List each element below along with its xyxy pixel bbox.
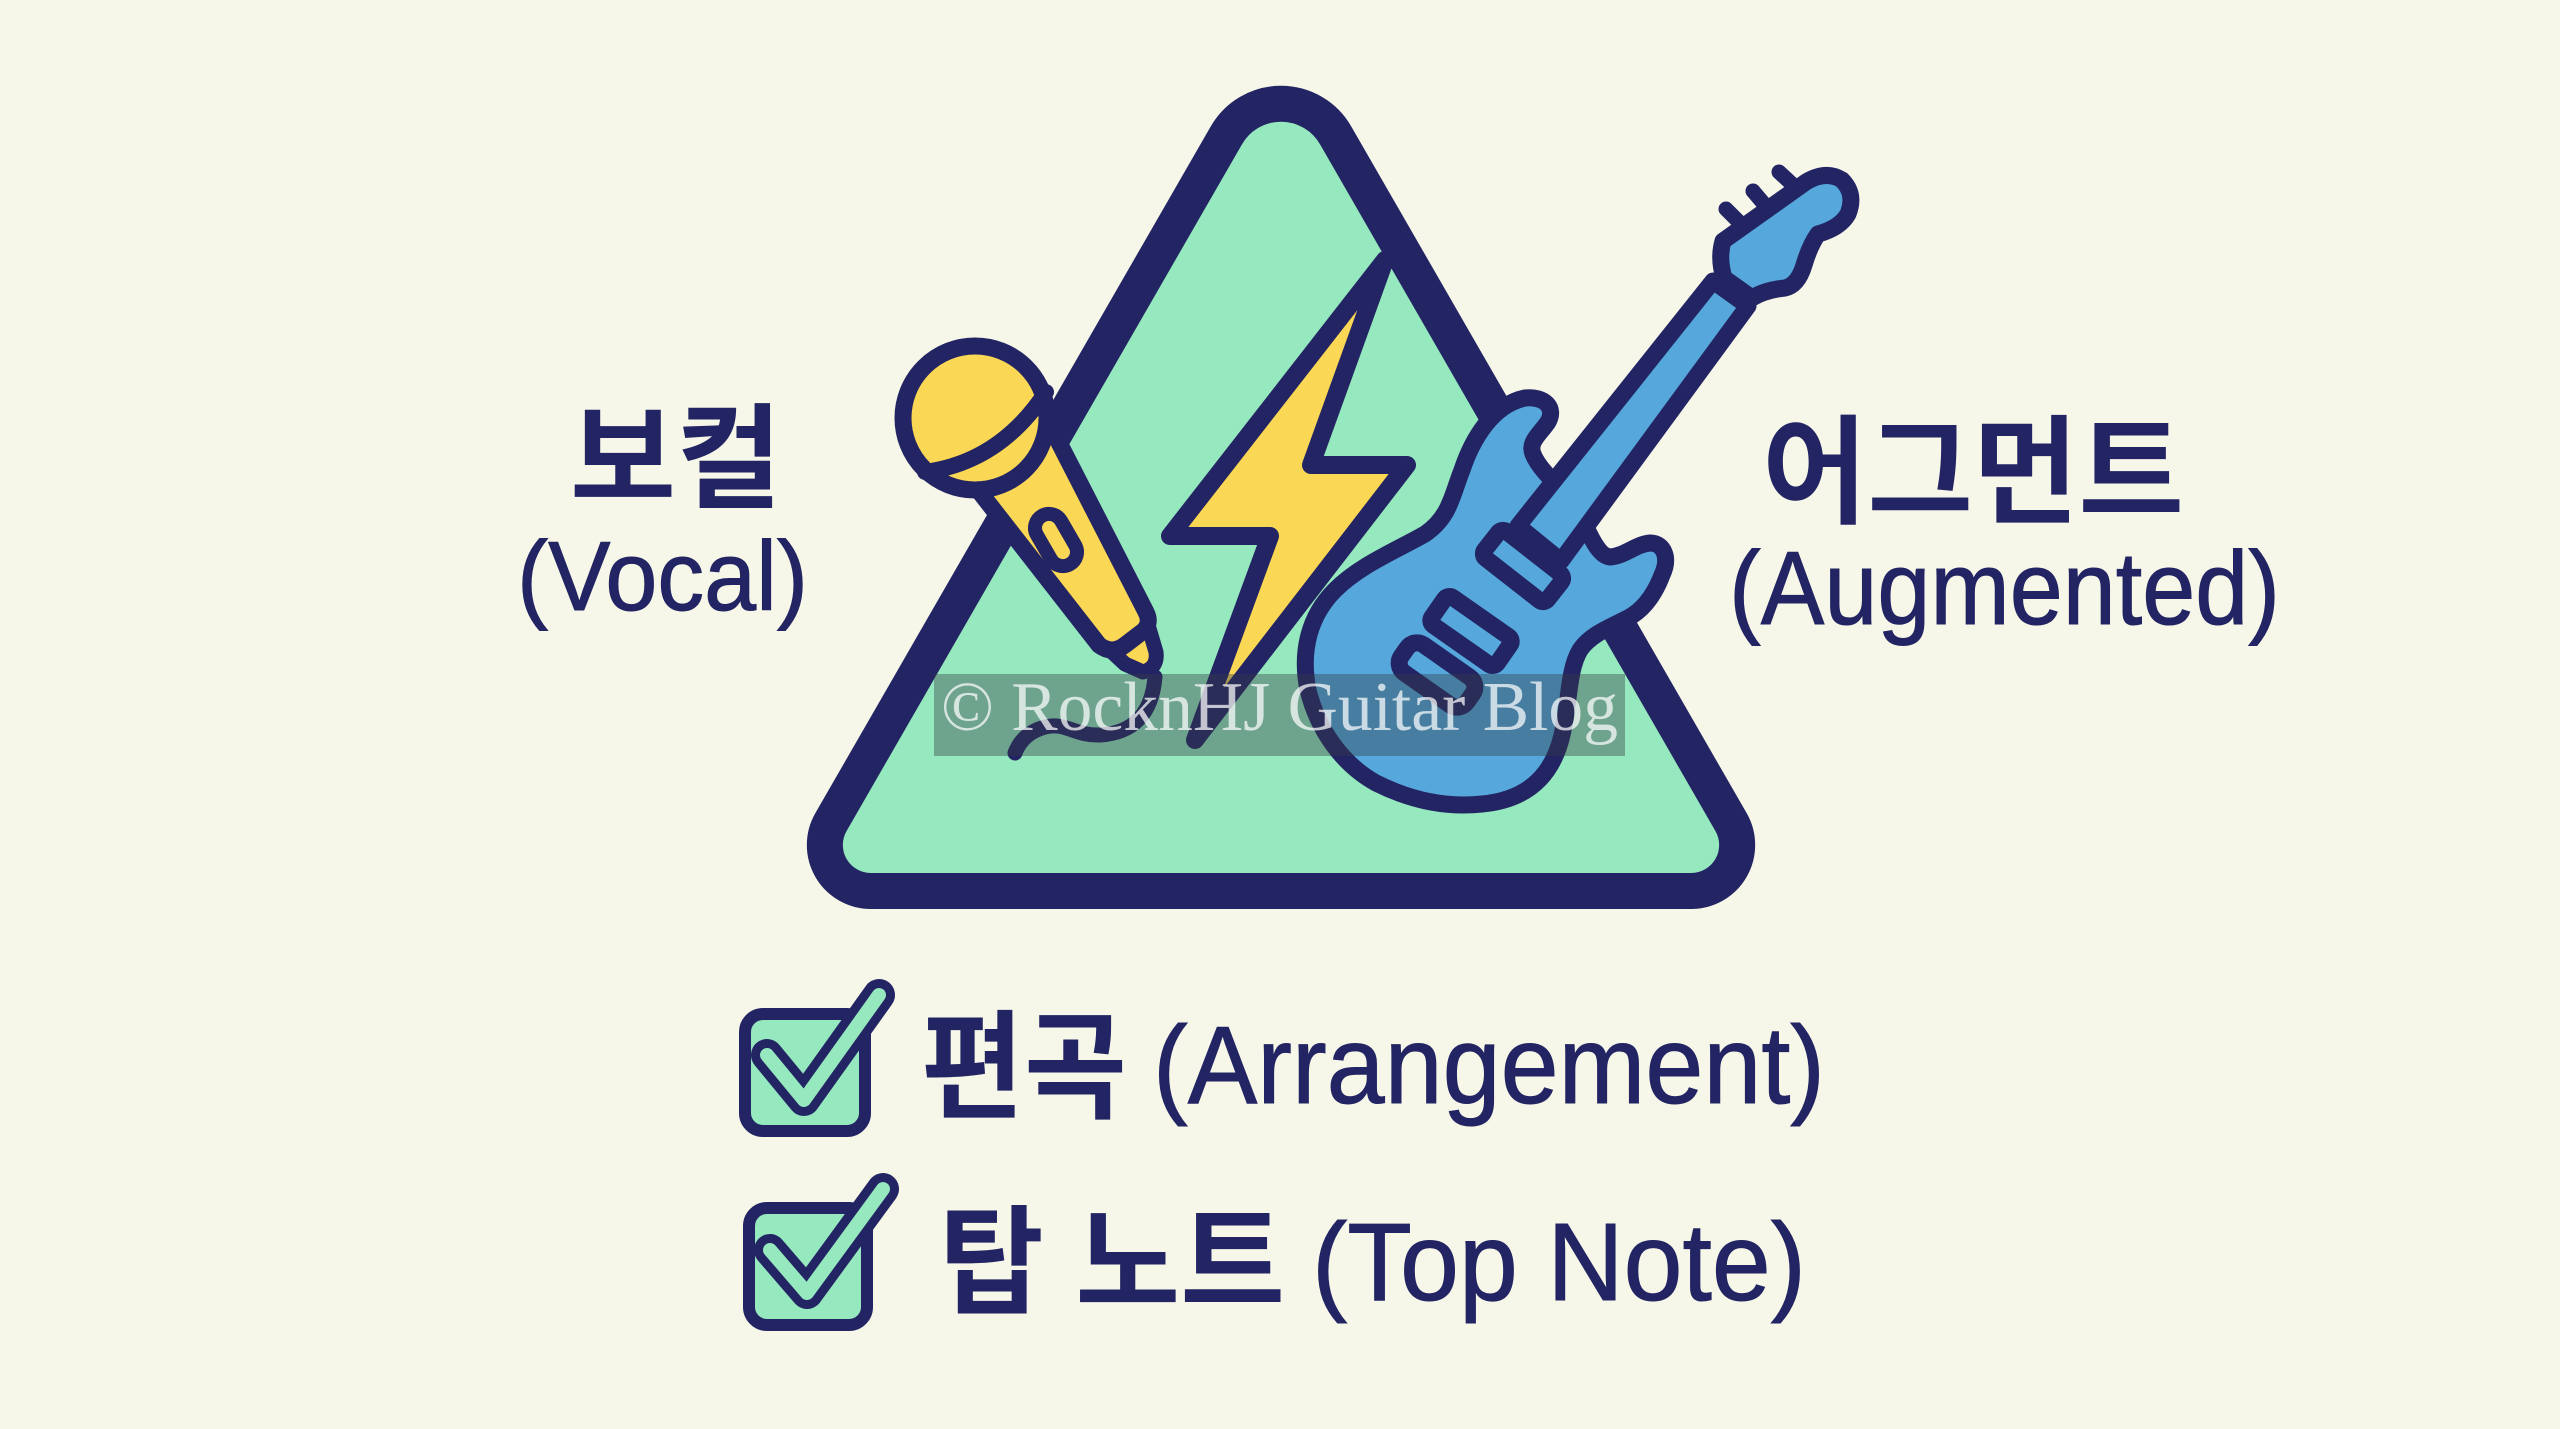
- microphone cable: [1015, 677, 1155, 753]
- icon: lightning bolt: [1170, 260, 1407, 740]
- label: vocal: [517, 397, 808, 631]
- text: arrangement English: (Arrangement): [1153, 1004, 1825, 1127]
- guitar neck: [1518, 281, 1748, 561]
- icon: checkbox: [745, 995, 879, 1131]
- icon: microphone: [903, 346, 1156, 753]
- microphone body: [968, 425, 1148, 650]
- neck plate: [1481, 528, 1565, 604]
- microphone band: [925, 392, 1046, 472]
- text: top note Korean: 탑 노트: [939, 1198, 1285, 1330]
- heading: augmented English: (Augmented): [1729, 531, 2280, 647]
- pickup two: [1394, 638, 1480, 712]
- heading: augmented Korean: 어그먼트: [1762, 408, 2184, 540]
- pickup one: [1428, 594, 1514, 668]
- label: augmented: [1729, 408, 2280, 647]
- icon: electric guitar: [1305, 172, 1851, 805]
- checklist item: arrangement: [745, 995, 1825, 1135]
- text: arrangement Korean: 편곡: [921, 1003, 1127, 1135]
- checklist item: top note: [749, 1189, 1806, 1330]
- text: top note English: (Top Note): [1312, 1201, 1806, 1324]
- watermark: © RocknHJ Guitar Blog: [941, 669, 1618, 746]
- icon: checkbox: [749, 1189, 883, 1325]
- tuning pegs: [1726, 172, 1793, 222]
- heading: vocal Korean: 보컬: [570, 397, 782, 524]
- guitar body: [1305, 398, 1666, 805]
- guitar headstock: [1721, 175, 1851, 298]
- microphone switch: [1030, 509, 1082, 571]
- microphone head: [903, 346, 1047, 490]
- triangle panel: [825, 104, 1737, 891]
- heading: vocal English: (Vocal): [517, 521, 808, 631]
- microphone tail: [1110, 625, 1156, 672]
